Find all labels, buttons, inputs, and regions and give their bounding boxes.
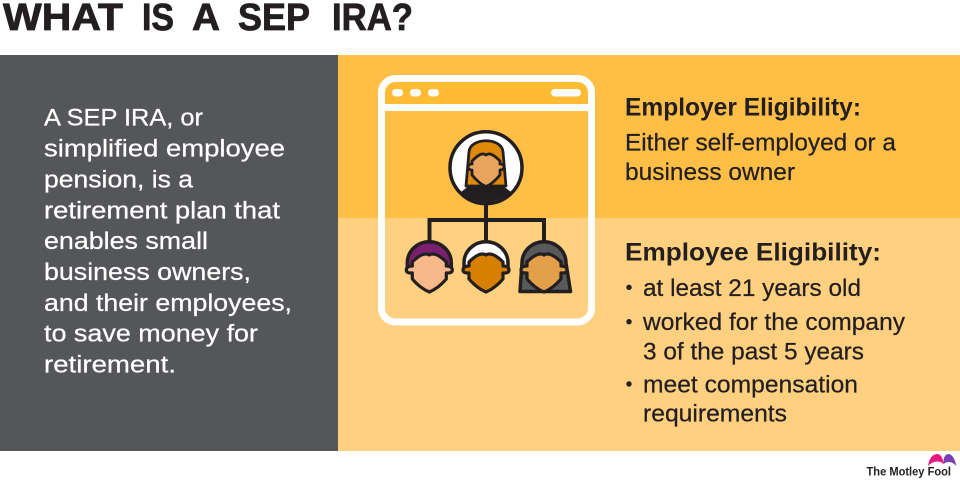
description text: simplified employee [44,136,285,162]
description text: business owners, [44,259,251,286]
panel: employer eligibility [338,55,960,218]
employee heading: Employee Eligibility: [625,238,881,266]
title [3,0,413,39]
description text: pension, is a [44,166,193,194]
employee bullet list: at least 21 years old [643,275,861,302]
person: employee 3 [520,242,570,292]
employee bullet list: worked for the company [642,309,906,336]
description text: and their employees, [44,290,292,317]
employer description: Either self-employed or a [625,130,896,156]
org chart connectors [430,203,544,242]
employee bullet list [626,275,906,428]
employee bullet list: meet compensation [643,372,858,399]
browser header band [385,79,592,107]
person: employee 1 [406,242,452,292]
employee bullet list: requirements [643,401,787,428]
employee eligibility text [625,238,906,428]
person: employee 2 [463,242,509,292]
description text: enables small [44,228,208,255]
logo wordmark: The Motley Fool [866,467,951,479]
description text: retirement. [44,352,176,378]
browser frame [382,78,592,322]
icon: browser window with org chart [381,78,592,322]
employer heading: Employer Eligibility: [625,94,861,122]
description text: to save money for [44,321,258,348]
person: manager [450,132,522,204]
jester hat [928,454,944,466]
panel: description [0,55,338,451]
employer description: business owner [625,159,795,186]
description text: retirement plan that [44,197,280,224]
panel: employee eligibility [338,218,960,451]
description text: A SEP IRA, or [44,104,203,132]
employee bullet list: 3 of the past 5 years [643,338,864,366]
employer description [625,130,896,186]
description text [44,104,292,378]
logo: The Motley Fool [866,454,956,479]
employer eligibility text [625,94,896,186]
